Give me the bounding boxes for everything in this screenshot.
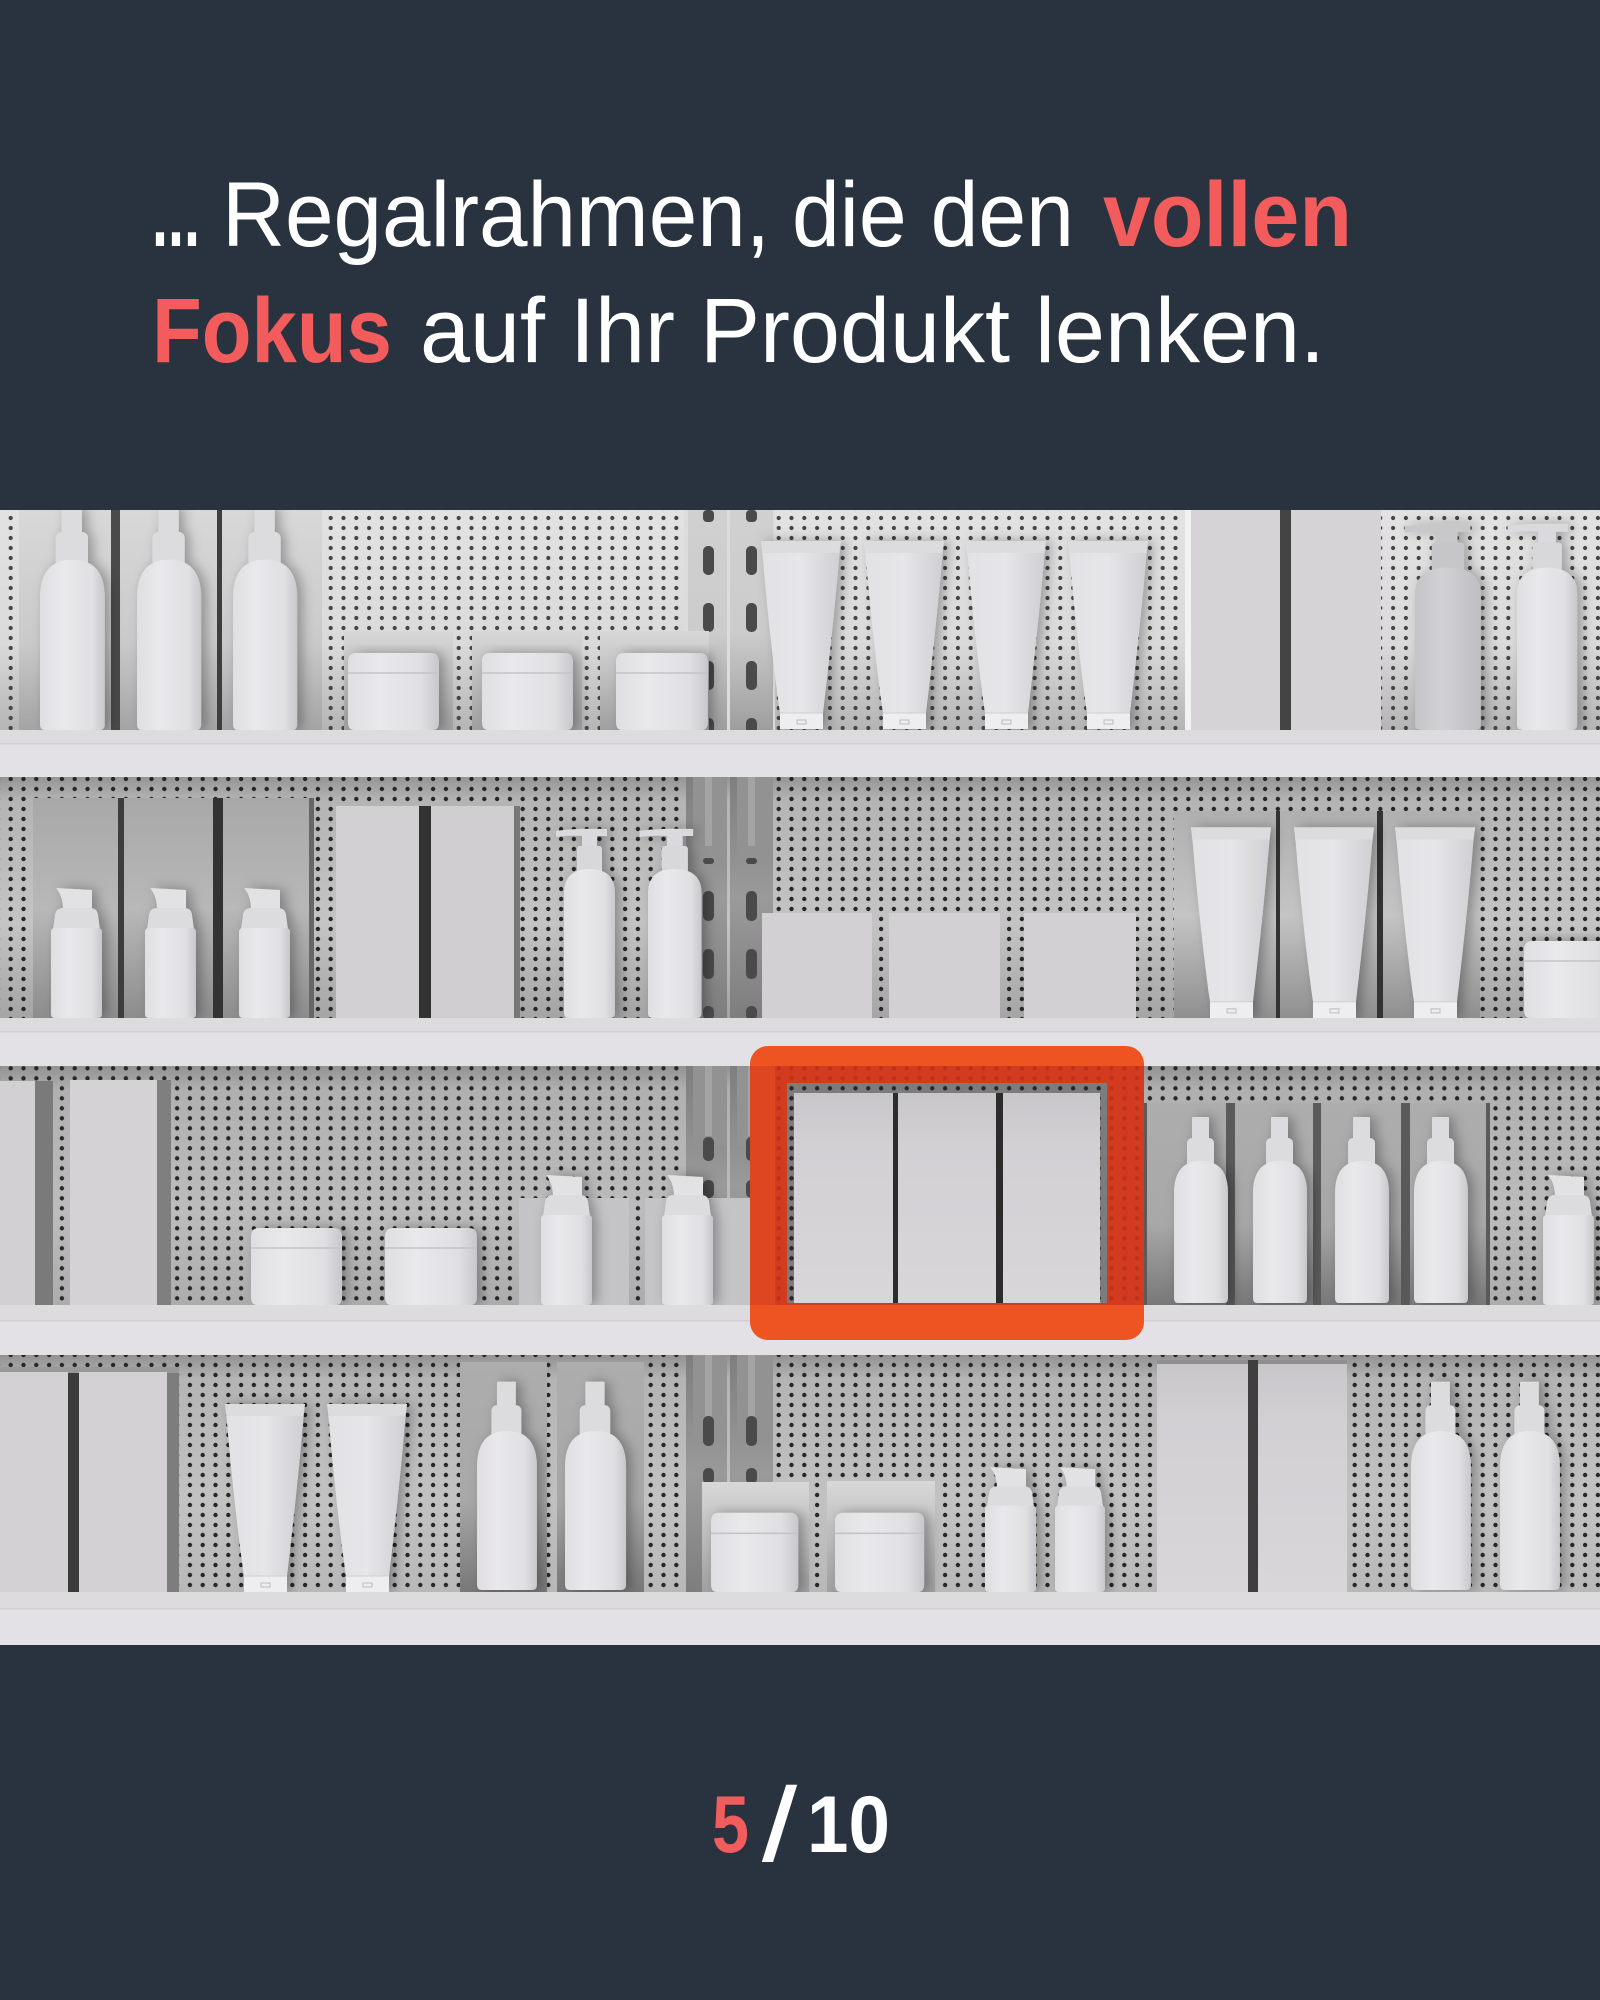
two pump bottles [1405, 524, 1577, 730]
shelf photo [0, 507, 1600, 1645]
page counter: 10 [807, 1780, 890, 1870]
page counter [712, 1767, 890, 1882]
two spray bottles [477, 1382, 626, 1590]
two tubes [225, 1404, 407, 1592]
boxes behind sprays [460, 1362, 644, 1592]
two airless bottles [541, 1175, 713, 1305]
airless bottle right [1543, 1175, 1594, 1305]
three airless bottles [51, 888, 290, 1018]
focused product boxes inside frame [787, 1083, 1107, 1303]
jar boxes [702, 1481, 935, 1592]
two tall boxes [1185, 510, 1381, 730]
boxes behind tubes [1174, 811, 1480, 1020]
tall boxes left [0, 1367, 179, 1592]
two airless bottles [985, 1467, 1105, 1592]
boxes behind airless bottles [519, 1198, 750, 1305]
page counter: / [763, 1767, 796, 1882]
title line 1: Regalrahmen, [222, 164, 770, 266]
pegboard back wall [0, 510, 1600, 1594]
title line 1: vollen [1103, 164, 1352, 266]
three jars [348, 653, 708, 730]
three low boxes [762, 913, 1136, 1018]
two tall boxes [1157, 1360, 1347, 1592]
metal uprights [684, 510, 775, 1594]
two jars [711, 1513, 924, 1592]
title line 2: Fokus [152, 280, 392, 382]
shelf row 3 products [0, 1080, 1594, 1305]
boxes behind spray bottles [1144, 1103, 1490, 1305]
jar at right edge [1524, 941, 1600, 1018]
highlight frame [750, 1046, 1144, 1340]
page counter: 5 [712, 1780, 749, 1870]
jar boxes [344, 631, 709, 730]
four spray bottles [1174, 1117, 1468, 1303]
two spray bottles [1411, 1382, 1560, 1590]
two tall boxes [336, 806, 520, 1020]
title line 2: auf Ihr Produkt lenken. [420, 280, 1325, 382]
title [152, 164, 1352, 382]
title line 1 [152, 164, 1352, 266]
shelf row 4 products [0, 1360, 1560, 1592]
three pump-stem bottles [40, 507, 297, 730]
shelf row 1 products [19, 507, 1577, 730]
two pump bottles [556, 829, 702, 1018]
shelf boards [0, 730, 1600, 1645]
three tubes [1191, 827, 1475, 1018]
shelf row 2 products [33, 798, 1600, 1020]
four tubes [761, 541, 1148, 729]
boxes behind airless bottles [33, 798, 314, 1020]
title line 1: die den [792, 164, 1074, 266]
tall boxes left [0, 1080, 171, 1305]
title line 1: ... [152, 164, 200, 266]
two jars [251, 1228, 477, 1305]
tall boxes behind bottles [19, 510, 322, 730]
